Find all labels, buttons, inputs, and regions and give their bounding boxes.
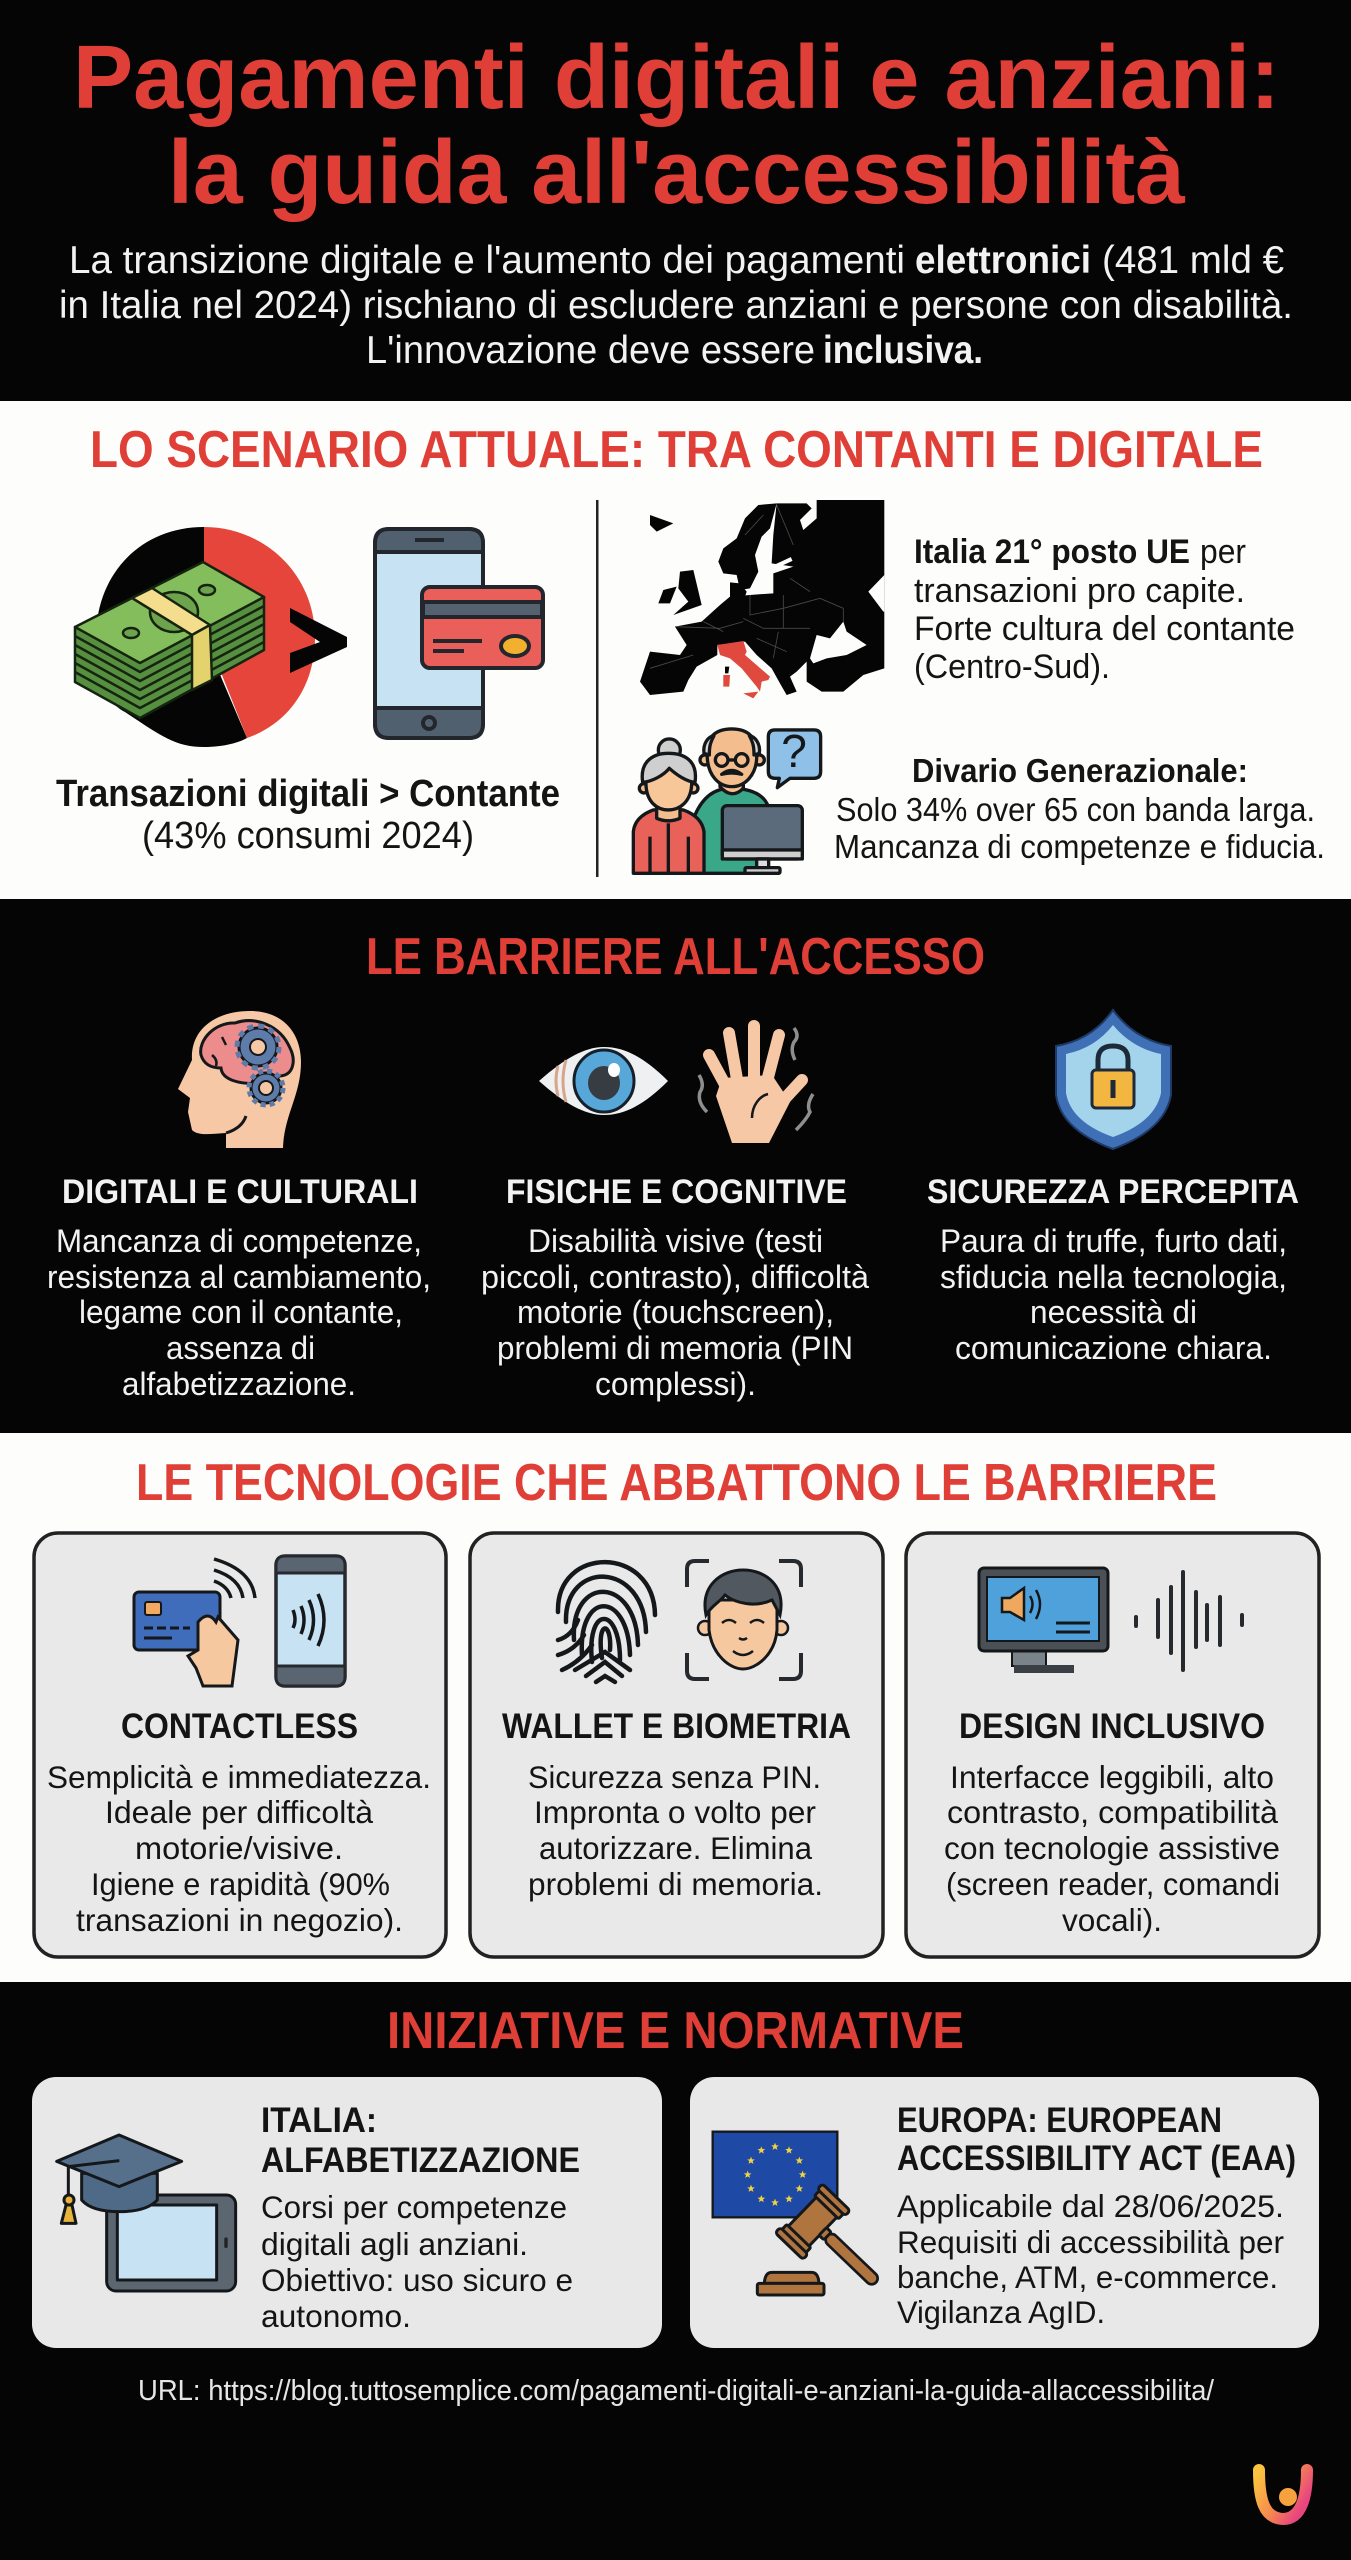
panel: inclusive design xyxy=(906,1533,1319,1957)
text: Italy ranking: transazioni pro capite. xyxy=(914,572,1245,610)
text: inclusive design xyxy=(944,1707,1280,1938)
text: inclusive design: contrasto, compatibilità xyxy=(947,1794,1278,1830)
column: physical and cognitive barriers: piccoli, contrasto), difficoltà xyxy=(481,1259,869,1295)
caption: digital vs cash xyxy=(56,773,560,857)
text: Europe: ACCESSIBILITY ACT (EAA) xyxy=(897,2139,1296,2178)
text: inclusive design: con tecnologie assistive xyxy=(944,1830,1280,1866)
column: digital and cultural barriers: resistenza al cambiamento, xyxy=(47,1259,431,1295)
icon: graduation cap and tablet xyxy=(57,2135,236,2291)
text: contactless: transazioni in negozio). xyxy=(76,1902,403,1938)
icon: banknote stack xyxy=(75,562,264,718)
icon: shaking hand xyxy=(699,1026,813,1143)
text: generational divide xyxy=(834,752,1325,865)
column: digital and cultural barriers: Mancanza di competenze, xyxy=(56,1223,422,1259)
intro text: inclusiva. xyxy=(823,329,983,372)
icon: pie chart with money xyxy=(75,527,347,747)
icon: elderly couple at computer xyxy=(633,729,821,873)
column: perceived security: Paura di truffe, furto dati, xyxy=(940,1223,1287,1259)
text: generational divide: Mancanza di competenze e fiducia. xyxy=(834,828,1325,865)
text: wallet: autorizzare. Elimina xyxy=(539,1830,812,1866)
text: Europe: Requisiti di accessibilità per xyxy=(897,2224,1284,2260)
caption: digital vs cash: (43% consumi 2024) xyxy=(142,815,474,857)
icon: shield with padlock xyxy=(1056,1010,1171,1149)
column: digital and cultural barriers: legame con il contante, xyxy=(79,1294,403,1330)
heading: initiatives: INIZIATIVE E NORMATIVE xyxy=(387,2002,964,2060)
column: perceived security xyxy=(927,1173,1299,1366)
caption: digital vs cash: Transazioni digitali > Contante xyxy=(56,773,560,815)
column: physical and cognitive barriers: Disabilità visive (testi xyxy=(528,1223,823,1259)
text: Europe: EUROPA: EUROPEAN xyxy=(897,2101,1222,2140)
text: Italy: autonomo. xyxy=(261,2298,411,2334)
column: physical and cognitive barriers: problemi di memoria (PIN xyxy=(497,1330,853,1366)
icon: head with gears xyxy=(178,1011,301,1148)
column: digital and cultural barriers xyxy=(47,1173,431,1402)
column: digital and cultural barriers: alfabetizzazione. xyxy=(122,1366,356,1402)
text: Europe: Vigilanza AgID. xyxy=(897,2294,1105,2330)
text: generational divide: Divario Generazionale: xyxy=(912,752,1248,789)
map: Europe with Italy highlighted xyxy=(640,500,884,698)
text: Italy: digitali agli anziani. xyxy=(261,2226,528,2262)
icon: question mark: ? xyxy=(781,725,807,777)
column: physical and cognitive barriers: FISICHE E COGNITIVE xyxy=(506,1173,847,1211)
panel: Europe xyxy=(690,2077,1319,2348)
intro text: elettronici xyxy=(915,239,1091,282)
text: contactless: motorie/visive. xyxy=(135,1830,343,1866)
text: Europe xyxy=(897,2101,1296,2330)
text: Italy ranking: (Centro-Sud). xyxy=(914,648,1110,686)
heading: barriers: LE BARRIERE ALL'ACCESSO xyxy=(366,928,985,986)
column: perceived security: sfiducia nella tecnologia, xyxy=(940,1259,1287,1295)
text: Italy: Corsi per competenze xyxy=(261,2189,567,2225)
text: Italy: ITALIA: xyxy=(261,2101,377,2140)
column: digital and cultural barriers: assenza di xyxy=(166,1330,315,1366)
title: la guida all'accessibilità xyxy=(168,123,1186,223)
text: generational divide: Solo 34% over 65 con banda larga. xyxy=(836,791,1315,828)
text: Italy xyxy=(261,2101,580,2334)
intro text: in Italia nel 2024) rischiano di escludere anziani e persone con disabilità. xyxy=(59,284,1293,327)
title: Pagamenti digitali e anziani: xyxy=(73,28,1280,128)
text: Europe: Applicabile dal 28/06/2025. xyxy=(897,2188,1284,2224)
text: inclusive design: vocali). xyxy=(1062,1902,1162,1938)
title xyxy=(73,28,1280,223)
intro text: L'innovazione deve essere xyxy=(366,329,815,372)
icon: fingerprint xyxy=(558,1562,655,1682)
column: physical and cognitive barriers xyxy=(481,1173,869,1402)
column: perceived security: necessità di xyxy=(1030,1294,1197,1330)
text: Europe: banche, ATM, e-commerce. xyxy=(897,2259,1278,2295)
text: wallet: problemi di memoria. xyxy=(528,1866,823,1902)
text: wallet: Impronta o volto per xyxy=(534,1794,816,1830)
intro text: La transizione digitale e l'aumento dei pagamenti xyxy=(69,239,905,282)
icon: card and phone xyxy=(134,1556,345,1686)
icon: phone with card xyxy=(375,529,543,738)
icon: monitor with speaker xyxy=(979,1568,1108,1673)
text: Italy ranking: Forte cultura del contante xyxy=(914,610,1295,648)
text: contactless: CONTACTLESS xyxy=(121,1707,358,1746)
url: URL: https://blog.tuttosemplice.com/pagamenti-digitali-e-anziani-la-guida-allaccessibilita/ xyxy=(138,2375,1215,2407)
panel: contactless xyxy=(34,1533,446,1957)
text: wallet: WALLET E BIOMETRIA xyxy=(502,1707,851,1746)
icon: logo xyxy=(1259,2470,1307,2519)
text: contactless: Ideale per difficoltà xyxy=(105,1794,373,1830)
text: inclusive design: (screen reader, comandi xyxy=(946,1866,1280,1902)
text: wallet: Sicurezza senza PIN. xyxy=(528,1759,821,1795)
text: inclusive design: DESIGN INCLUSIVO xyxy=(959,1707,1265,1746)
column: physical and cognitive barriers: motorie (touchscreen), xyxy=(517,1294,834,1330)
icon: sound wave xyxy=(1136,1572,1242,1670)
panel: Italy xyxy=(32,2077,662,2348)
text: Italy ranking xyxy=(914,533,1295,686)
text: Italy ranking: per xyxy=(1200,533,1246,571)
column: perceived security: comunicazione chiara. xyxy=(955,1330,1272,1366)
icon: EU flag and gavel xyxy=(713,2132,872,2295)
text: contactless xyxy=(47,1707,431,1938)
column: physical and cognitive barriers: complessi). xyxy=(595,1366,756,1402)
text: wallet xyxy=(502,1707,851,1902)
intro text xyxy=(59,239,1293,372)
icon: eye xyxy=(539,1047,668,1115)
text: Italy ranking: Italia 21° posto UE xyxy=(914,533,1190,571)
text: contactless: Igiene e rapidità (90% xyxy=(91,1866,390,1902)
text: inclusive design: Interfacce leggibili, alto xyxy=(950,1759,1274,1795)
text: contactless: Semplicità e immediatezza. xyxy=(47,1759,431,1795)
text: Italy: ALFABETIZZAZIONE xyxy=(261,2141,580,2180)
panel: wallet and biometrics xyxy=(470,1533,883,1957)
column: perceived security: SICUREZZA PERCEPITA xyxy=(927,1173,1299,1211)
column: digital and cultural barriers: DIGITALI E CULTURALI xyxy=(62,1173,418,1211)
intro text: (481 mld € xyxy=(1102,239,1284,282)
text: Italy: Obiettivo: uso sicuro e xyxy=(261,2262,573,2298)
icon: face scan xyxy=(687,1561,801,1679)
